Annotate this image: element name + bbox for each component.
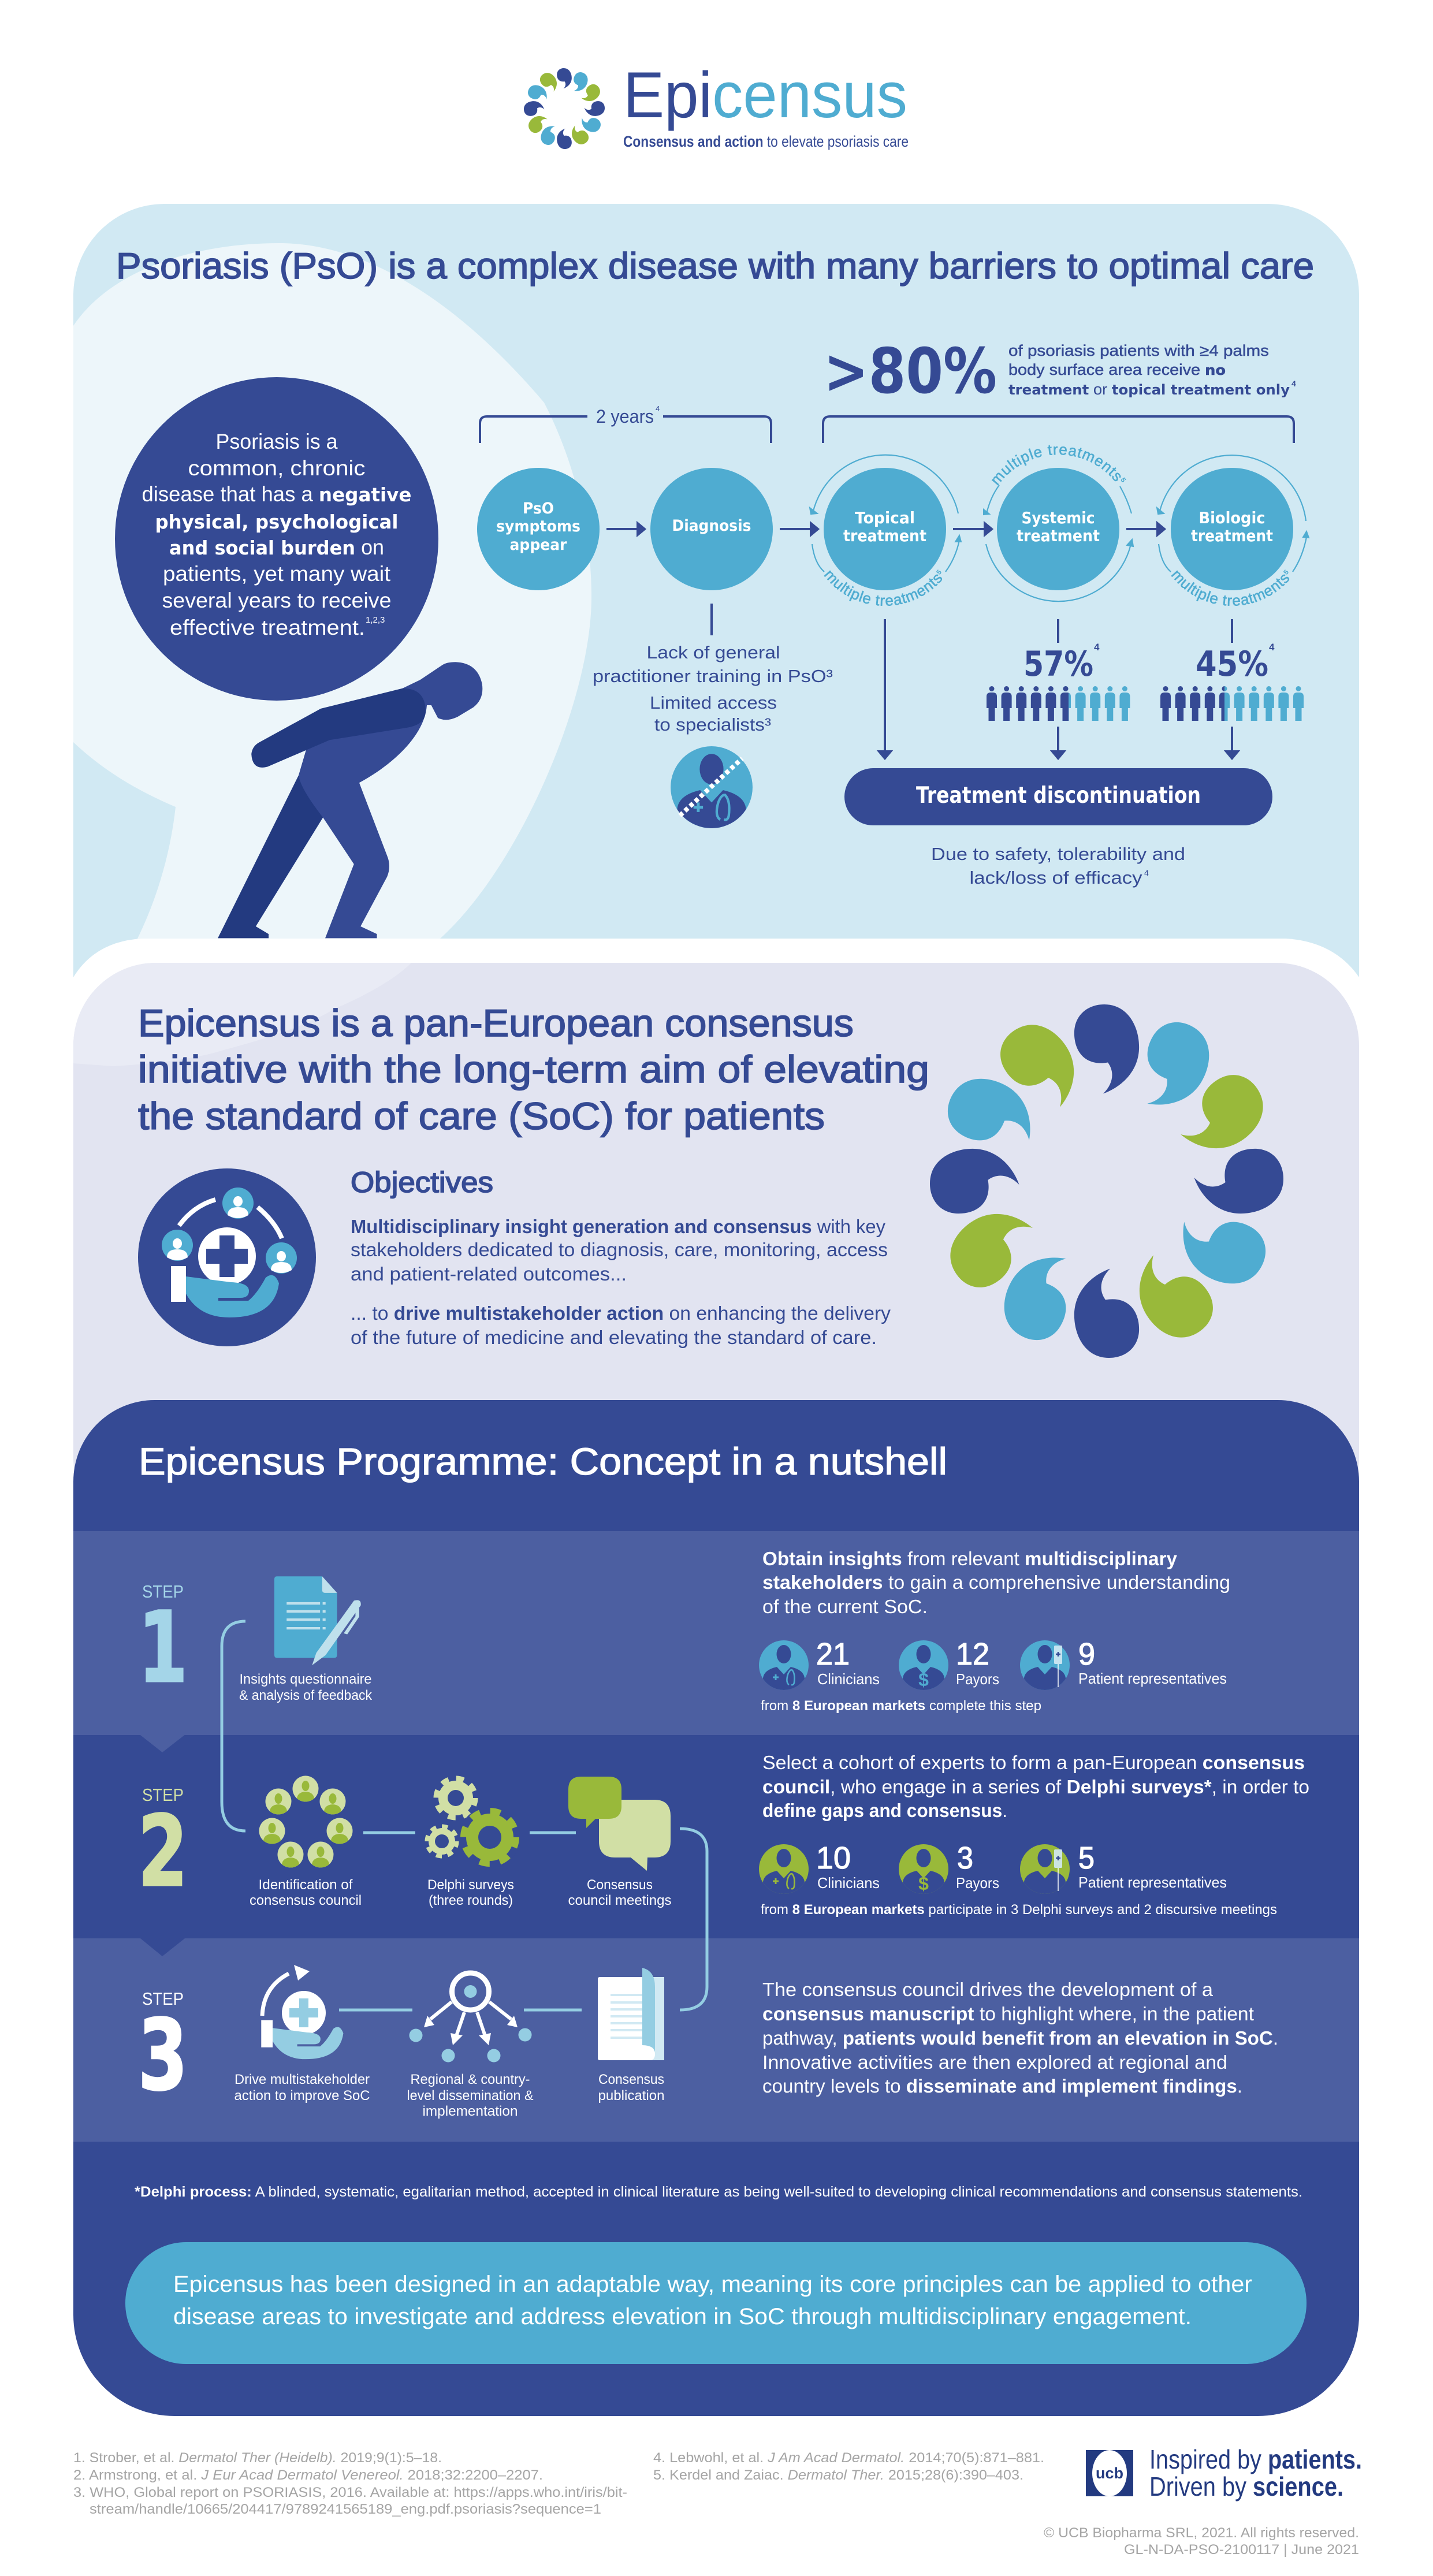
references left: 3. WHO, Global report on PSORIASIS, 2016. Available at: https://apps.who.int/iris/bit- <box>73 2485 627 2500</box>
stat: 57 percent discontinuation <box>987 619 1130 758</box>
UCB logo: ucb <box>1096 2465 1123 2482</box>
flow: PsO symptoms appear: symptoms <box>496 518 580 535</box>
text: step 3 description: pathway, patients would benefit from an elevation in SoC. <box>762 2027 1278 2049</box>
references left: stream/handle/10665/204417/9789241565189_eng.pdf.psoriasis?sequence=1 <box>90 2501 601 2517</box>
copyright <box>1044 2525 1359 2558</box>
logo tagline: Consensus and action to elevate psoriasis care <box>623 133 909 150</box>
copyright: © UCB Biopharma SRL, 2021. All rights reserved. <box>1044 2525 1359 2541</box>
caption: Delphi surveys <box>427 1877 514 1908</box>
text: objectives: and patient-related outcomes... <box>351 1263 627 1285</box>
bracket: over 80 percent <box>823 416 1294 443</box>
stat: 9 patient representatives: Patient representatives <box>1078 1670 1227 1687</box>
callout: disease burden circle: disease that has a negative <box>142 482 411 506</box>
text: step 2 description: define gaps and consensus. <box>762 1800 1007 1821</box>
text: step 2 description: council, who engage in a series of Delphi surveys*, in order to <box>762 1776 1309 1797</box>
text: step 3 description: country levels to disseminate and implement findings. <box>762 2075 1242 2097</box>
text: discontinuation reasons <box>931 844 1185 888</box>
bracket: 2 years <box>480 404 771 443</box>
pill: treatment discontinuation: Treatment discontinuation <box>916 783 1201 809</box>
heading: Epicensus initiative: initiative with the long-term aim of elevating <box>138 1048 929 1090</box>
text: objectives: Multidisciplinary insight generation and consensus with key <box>351 1216 885 1237</box>
step 1 label: 1 <box>138 1591 188 1704</box>
logo wordmark: Epicensus <box>623 59 907 131</box>
stat: 9 patient representatives <box>1020 1637 1227 1694</box>
text: step 1 description: Obtain insights from relevant multidisciplinary <box>762 1548 1178 1569</box>
text: step 1 description: of the current SoC. <box>762 1596 928 1617</box>
heading: Epicensus initiative: the standard of care (SoC) for patients <box>138 1095 825 1137</box>
callout: disease burden circle <box>115 377 438 701</box>
text: step 2 markets: from 8 European markets participate in 3 Delphi surveys and 2 discursive meetings <box>761 1902 1277 1918</box>
bracket: 2 years: 2 years <box>596 406 654 427</box>
text: objectives: stakeholders dedicated to diagnosis, care, monitoring, access <box>351 1239 888 1260</box>
heading: programme: Epicensus Programme: Concept in a nutshell <box>139 1440 947 1483</box>
caption: publication: Consensus <box>598 2072 664 2087</box>
stat: 12 payors: Payors <box>956 1670 999 1688</box>
heading: psoriasis panel: Psoriasis (PsO) is a complex disease with many barriers to optimal care <box>116 246 1314 286</box>
arrow <box>606 523 645 535</box>
flow: Biologic treatment: multiple treatments <box>1171 570 1289 606</box>
references left: 2. Armstrong, et al. J Eur Acad Dermatol Venereol. 2018;32:2200–2207. <box>73 2467 543 2483</box>
flow: Diagnosis: Diagnosis <box>672 517 751 535</box>
panel: programme background <box>73 1400 1359 2416</box>
callout: disease burden circle: effective treatment. <box>170 616 365 639</box>
icon: consensus publication <box>598 1968 664 2060</box>
text: objectives: of the future of medicine and elevating the standard of care. <box>351 1327 877 1348</box>
stat: 3 payors: $ <box>918 1873 929 1894</box>
flow: Biologic treatment: treatment <box>1191 526 1273 545</box>
caption: dissemination: Regional & country- <box>410 2072 530 2087</box>
stat: 5 patient representatives: Patient representatives <box>1078 1874 1227 1891</box>
caption: publication: publication <box>598 2088 664 2104</box>
text: step 1 markets: from 8 European markets complete this step <box>761 1698 1041 1714</box>
stat: 57 percent discontinuation: 57% <box>1023 644 1093 684</box>
text: step 1 description <box>762 1548 1230 1617</box>
flow: Topical treatment: Topical <box>855 508 915 527</box>
stat: 10 clinicians: Clinicians <box>817 1874 880 1892</box>
step 1 label: STEP <box>142 1581 184 1602</box>
heading: Epicensus initiative <box>138 1002 929 1137</box>
stat: 45 percent discontinuation <box>1160 619 1304 758</box>
callout: disease burden circle: 1,2,3 <box>366 615 385 625</box>
step 2 label <box>138 1785 188 1908</box>
figure carrying burden <box>218 662 482 938</box>
caption: drive action: action to improve SoC <box>235 2088 370 2104</box>
arrow <box>1126 523 1164 535</box>
stat: over 80 percent: 4 <box>1291 379 1296 388</box>
stat: 5 patient representatives <box>1020 1841 1227 1898</box>
caption: consensus council: consensus council <box>250 1893 362 1908</box>
stat: 3 payors: Payors <box>956 1874 999 1892</box>
caption: drive action <box>235 2072 370 2104</box>
arrow: topical to discontinuation <box>879 619 891 758</box>
flow: PsO symptoms appear: PsO <box>523 500 554 518</box>
text: step 3 description <box>762 1979 1278 2097</box>
callout: adaptable design: disease areas to investigate and address elevation in SoC through multidisciplinary engagement. <box>173 2304 1192 2329</box>
stat: 12 payors: 12 <box>956 1637 989 1672</box>
callout: disease burden circle: and social burden on <box>169 535 384 559</box>
text: objectives: Objectives <box>351 1166 493 1198</box>
caption: council meetings: Consensus <box>587 1877 653 1893</box>
step 3 label: 3 <box>138 1998 188 2112</box>
text: objectives: ... to drive multistakeholder action on enhancing the delivery <box>351 1302 891 1324</box>
flow: Biologic treatment <box>1156 455 1310 606</box>
references left: 1. Strober, et al. Dermatol Ther (Heidelb). 2019;9(1):5–18. <box>73 2450 442 2466</box>
stat: 45 percent discontinuation: 45% <box>1196 644 1268 684</box>
text: objectives <box>351 1166 891 1348</box>
caption: dissemination: implementation <box>423 2104 518 2119</box>
stat: 10 clinicians <box>759 1841 880 1898</box>
step 3 label: STEP <box>142 1989 184 2009</box>
flow: Biologic treatment: 5 <box>1283 569 1288 574</box>
icon: doctor with dotted strike-through <box>671 746 753 835</box>
text: discontinuation reasons: lack/loss of efficacy <box>969 868 1142 888</box>
copyright: GL-N-DA-PSO-2100117 | June 2021 <box>1124 2542 1359 2558</box>
stat: over 80 percent <box>824 336 1296 408</box>
stat: 21 clinicians: 21 <box>816 1637 850 1672</box>
caption: dissemination: level dissemination & <box>407 2088 534 2104</box>
stat: over 80 percent: >80% <box>824 336 997 408</box>
caption: consensus council <box>250 1877 362 1908</box>
band: step 1 <box>73 1531 1359 1752</box>
diagnosis barriers text <box>593 604 833 735</box>
icon: hand with plus and arrow <box>261 1965 343 2059</box>
callout: adaptable design <box>125 2242 1307 2364</box>
caption: dissemination <box>407 2072 534 2119</box>
caption: publication <box>598 2072 664 2104</box>
stat: 45 percent discontinuation: 4 <box>1269 642 1275 653</box>
stat: 12 payors: $ <box>918 1669 929 1690</box>
logo ring of speech marks <box>524 68 605 149</box>
callout: disease burden circle: common, chronic <box>188 456 365 480</box>
flow: Systemic treatment: treatment <box>1017 526 1100 545</box>
connector: process path <box>222 1621 707 2010</box>
caption: drive action: Drive multistakeholder <box>235 2072 370 2087</box>
references right: 5. Kerdel and Zaiac. Dermatol Ther. 2015;28(6):390–403. <box>653 2467 1023 2483</box>
text: step 3 description: The consensus council drives the development of a <box>762 1979 1214 2000</box>
icon: questionnaire and pen <box>274 1576 361 1665</box>
flow: Topical treatment: multiple treatments <box>824 570 943 606</box>
flow: PsO symptoms appear <box>477 468 600 590</box>
text: step 2 description: Select a cohort of experts to form a pan-European consensus <box>762 1752 1305 1773</box>
band: step 3 <box>73 1938 1359 2142</box>
stat: 3 payors <box>899 1841 999 1898</box>
text: step 3 description: Innovative activities are then explored at regional and <box>762 2052 1227 2073</box>
heading: Epicensus initiative: Epicensus is a pan-European consensus <box>138 1002 854 1044</box>
icon: speech bubbles <box>568 1777 671 1871</box>
UCB strapline: Inspired by patients. <box>1149 2444 1362 2474</box>
bracket: 2 years: 4 <box>656 404 660 413</box>
flow: PsO symptoms appear: appear <box>509 536 567 554</box>
flow: Topical treatment <box>809 454 962 606</box>
stat: 12 payors <box>899 1637 999 1694</box>
flow: Topical treatment: 5 <box>936 569 941 574</box>
flow: Biologic treatment: Biologic <box>1199 508 1265 527</box>
flow: Topical treatment: treatment <box>843 526 926 545</box>
flow: Diagnosis <box>650 468 773 590</box>
footnote: Delphi process: *Delphi process: A blinded, systematic, egalitarian method, accepted in clinical literature as being well-suited to developing clinical recommendations and consensus statements. <box>135 2184 1302 2200</box>
stat: 57 percent discontinuation: 4 <box>1094 642 1100 653</box>
stat: 10 clinicians: 10 <box>816 1841 851 1875</box>
flow: Systemic treatment <box>983 445 1134 602</box>
flow: Systemic treatment: Systemic <box>1021 508 1095 527</box>
icon: objectives hand with stakeholders <box>138 1168 316 1346</box>
UCB logo <box>1086 2450 1133 2496</box>
stat: 5 patient representatives: 5 <box>1078 1841 1095 1875</box>
caption: council meetings <box>568 1877 671 1908</box>
flow: Systemic treatment: 5 <box>1121 477 1126 482</box>
text: discontinuation reasons: Due to safety, tolerability and <box>931 844 1185 864</box>
UCB strapline <box>1149 2444 1362 2501</box>
panel: Epicensus initiative background <box>73 963 1359 1469</box>
step 2 label: 2 <box>138 1795 188 1908</box>
logo <box>524 59 909 150</box>
stat: 21 clinicians: Clinicians <box>817 1670 880 1688</box>
text: step 1 description: stakeholders to gain a comprehensive understanding <box>762 1572 1230 1593</box>
diagnosis barriers text: Limited access <box>650 693 777 713</box>
stat: over 80 percent: treatment or topical treatment only <box>1008 381 1290 398</box>
flow: Systemic treatment: multiple treatments <box>991 445 1121 485</box>
diagnosis barriers text: practitioner training in PsO³ <box>593 666 833 686</box>
graphic: ring of speech marks <box>930 1004 1283 1358</box>
arrow <box>953 523 992 535</box>
references left <box>73 2450 627 2517</box>
stat: 21 clinicians <box>759 1637 880 1694</box>
icon: gears <box>427 1778 516 1864</box>
white separator <box>73 939 1359 1040</box>
references right <box>653 2450 1044 2483</box>
UCB strapline: Driven by science. <box>1149 2471 1343 2501</box>
caption: Delphi surveys: (three rounds) <box>429 1893 513 1908</box>
step 1 label <box>138 1581 188 1704</box>
caption: council meetings: council meetings <box>568 1893 671 1908</box>
caption: insights questionnaire: & analysis of feedback <box>239 1688 373 1703</box>
text: discontinuation reasons: 4 <box>1144 868 1149 877</box>
icon: dissemination network <box>409 1973 531 2062</box>
callout: disease burden circle: physical, psychological <box>155 511 399 533</box>
pill: treatment discontinuation <box>844 768 1272 825</box>
callout: disease burden circle: several years to receive <box>162 589 392 612</box>
diagnosis barriers text: Lack of general <box>647 642 780 662</box>
caption: insights questionnaire: Insights questionnaire <box>239 1672 372 1687</box>
text: step 2 description <box>762 1752 1309 1821</box>
stat: over 80 percent: body surface area receive no <box>1008 361 1226 378</box>
caption: consensus council: Identification of <box>259 1877 353 1893</box>
step 3 label <box>138 1989 188 2112</box>
icon: consensus council <box>259 1775 352 1868</box>
references right: 4. Lebwohl, et al. J Am Acad Dermatol. 2014;70(5):871–881. <box>653 2450 1044 2466</box>
callout: disease burden circle: Psoriasis is a <box>216 430 338 453</box>
arrow <box>780 523 818 535</box>
caption: Delphi surveys: Delphi surveys <box>427 1877 514 1893</box>
diagnosis barriers text: to specialists³ <box>654 714 771 735</box>
stat: over 80 percent: of psoriasis patients with ≥4 palms <box>1008 342 1269 359</box>
stat: 9 patient representatives: 9 <box>1078 1637 1095 1672</box>
callout: disease burden circle: patients, yet many wait <box>163 562 391 586</box>
panel: psoriasis background <box>73 204 1359 1017</box>
callout: adaptable design: Epicensus has been designed in an adaptable way, meaning its core principles can be applied to other <box>173 2272 1252 2297</box>
stat: 3 payors: 3 <box>957 1841 973 1875</box>
caption: insights questionnaire <box>239 1672 373 1703</box>
text: step 3 description: consensus manuscript to highlight where, in the patient <box>762 2003 1254 2024</box>
step 2 label: STEP <box>142 1785 184 1805</box>
